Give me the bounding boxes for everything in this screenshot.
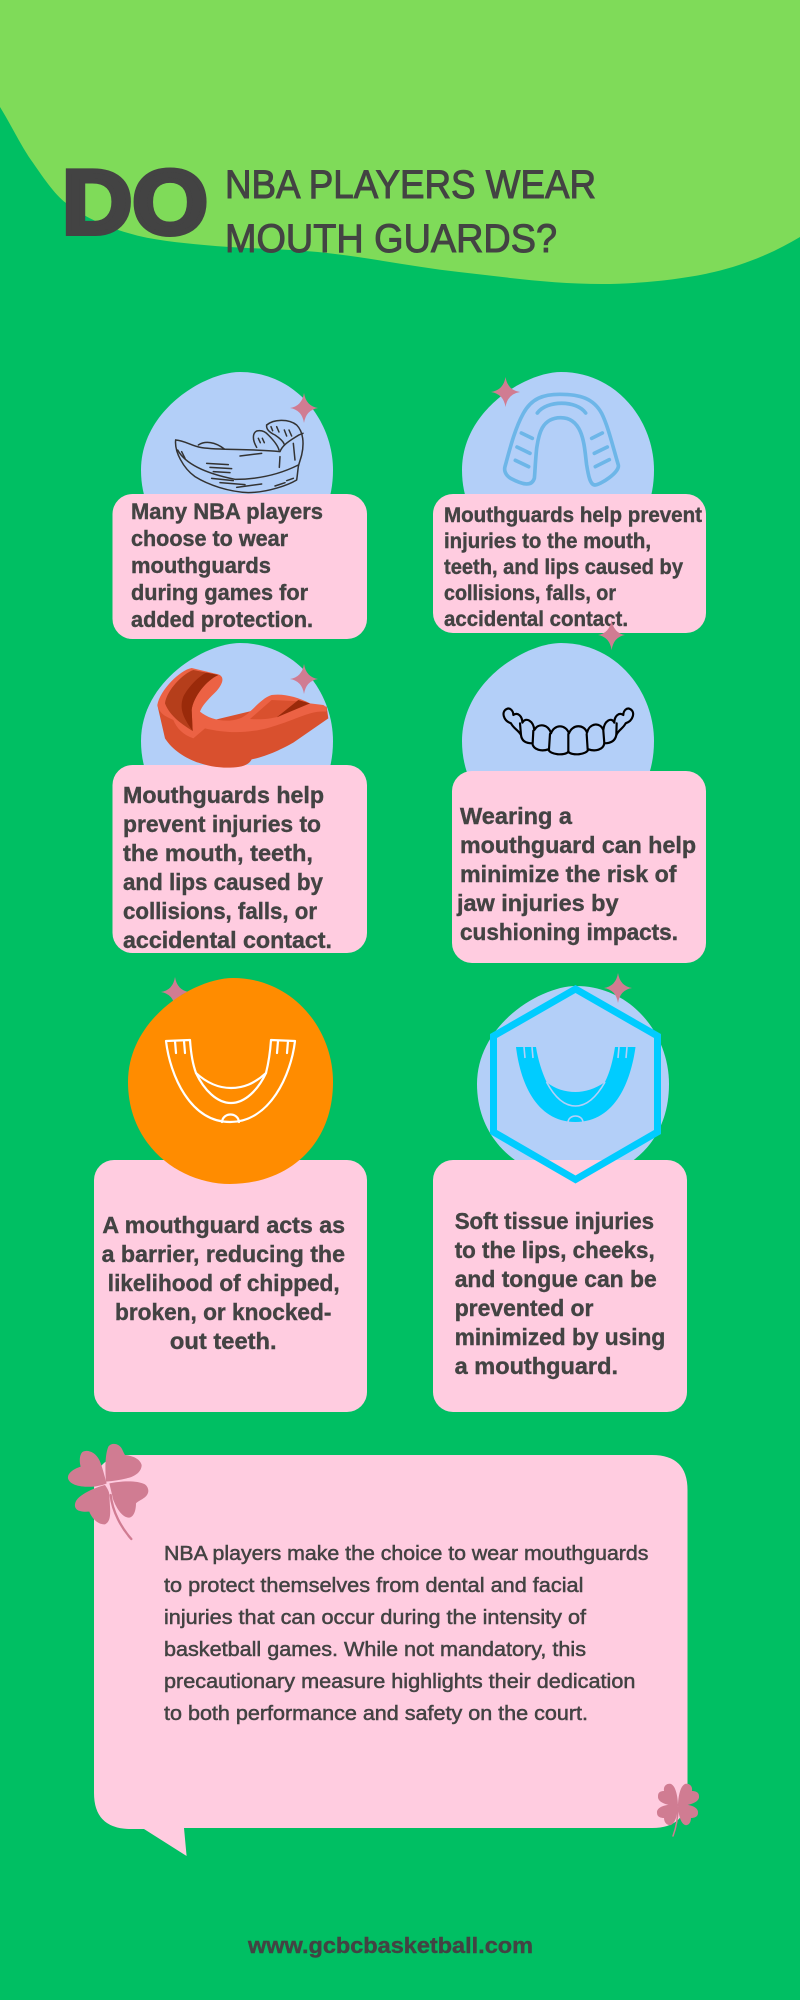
panel: many players choose mouthguards [112, 372, 367, 639]
icon: blue hexagon frame [494, 989, 658, 1180]
card 5 [94, 1160, 367, 1412]
card 3 [112, 765, 367, 953]
card 3 text: collisions, falls, or [123, 898, 317, 924]
card 2 text: accidental contact. [444, 608, 628, 631]
panel: conclusion speech bubble [68, 1444, 699, 1856]
sparkle 1 [290, 393, 318, 423]
card 2 text: teeth, and lips caused by [444, 556, 683, 579]
panel: barrier against chipped teeth [94, 977, 367, 1412]
card 5 text: A mouthguard acts as [102, 1212, 345, 1238]
icon: blue mouthguard [516, 1047, 636, 1122]
sparkle 5 [161, 977, 189, 1007]
card 5 text: a barrier, reducing the [102, 1241, 345, 1267]
icon backdrop blob 6 [477, 986, 669, 1179]
card 4 [452, 771, 706, 963]
card 6 text [455, 1208, 665, 1379]
card 3 text: the mouth, teeth, [123, 840, 313, 866]
card 6 text: prevented or [455, 1295, 594, 1321]
card 2 text: Mouthguards help prevent [444, 504, 702, 527]
card 6 text: Soft tissue injuries [455, 1208, 654, 1234]
icon: red mouthguard [157, 668, 328, 768]
footer website: www.gcbcbasketball.com [247, 1933, 533, 1958]
icon backdrop blob 1 [141, 372, 333, 565]
panel: prevents injuries (middle left) [112, 643, 367, 953]
card 6 text: minimized by using [455, 1324, 665, 1350]
card 6 text: a mouthguard. [455, 1353, 618, 1379]
icon: teeth outline [504, 709, 633, 754]
title: DO [62, 152, 208, 254]
card 5 text: broken, or knocked- [115, 1299, 331, 1325]
card 1 text: Many NBA players [131, 499, 323, 524]
title: MOUTH GUARDS? [225, 217, 557, 261]
card 2 text: collisions, falls, or [444, 582, 616, 605]
panel: prevents injuries (top right) [433, 372, 706, 633]
card 2 text: injuries to the mouth, [444, 530, 651, 553]
card 3 text: accidental contact. [123, 927, 332, 953]
title: NBA PLAYERS WEAR [225, 163, 596, 207]
card 1 text: added protection. [131, 607, 313, 632]
card 3 text: Mouthguards help [123, 782, 324, 808]
sparkle over top-right card [598, 620, 625, 650]
card 2 text [444, 504, 702, 631]
card 4 text: cushioning impacts. [460, 919, 678, 945]
card 4 text: minimize the risk of [460, 861, 677, 887]
icon backdrop blob 4 [462, 643, 654, 836]
conclusion text: NBA players make the choice to wear mouthguards [164, 1543, 648, 1565]
card 3 text [123, 782, 332, 953]
conclusion text [164, 1543, 648, 1725]
card 3 text: prevent injuries to [123, 811, 321, 837]
card 3 text: and lips caused by [123, 869, 323, 895]
conclusion text: precautionary measure highlights their dedication [164, 1671, 635, 1693]
card 1 text: during games for [131, 580, 308, 605]
icon backdrop blob 3 [141, 643, 333, 836]
card 4 text: mouthguard can help [460, 832, 696, 858]
card 1 text [131, 499, 323, 632]
speech bubble [94, 1455, 688, 1856]
card 1 [112, 494, 367, 639]
icon: white mouthguard outline [166, 1040, 295, 1122]
icon: blue outline mouthguard [505, 394, 618, 485]
panel: jaw injuries [452, 643, 706, 963]
conclusion text: basketball games. While not mandatory, this [164, 1639, 586, 1661]
sparkle 3 [290, 664, 318, 694]
card 4 text: jaw injuries by [456, 890, 619, 916]
card 1 text: choose to wear [131, 526, 288, 551]
card 5 text: likelihood of chipped, [108, 1270, 340, 1296]
icon: large clover [68, 1444, 148, 1539]
icon backdrop blob 2 [462, 372, 654, 565]
card 5 text [102, 1212, 345, 1354]
card 5 text: out teeth. [170, 1328, 277, 1354]
orange circle [128, 978, 333, 1184]
header wave [0, 0, 800, 284]
card 6 text: and tongue can be [455, 1266, 657, 1292]
card 4 text [456, 803, 696, 945]
sparkle 6 [604, 973, 632, 1003]
conclusion text: to both performance and safety on the court. [164, 1703, 588, 1725]
icon: small clover [657, 1784, 699, 1836]
card 4 text: Wearing a [460, 803, 572, 829]
sparkle 2 [491, 377, 520, 407]
card 1 text: mouthguards [131, 553, 271, 578]
card 6 [433, 1160, 687, 1412]
panel: soft tissue injuries [433, 973, 687, 1412]
conclusion text: injuries that can occur during the intensity of [164, 1607, 586, 1629]
card 2 [433, 494, 706, 633]
card 6 text: to the lips, cheeks, [455, 1237, 655, 1263]
icon: sketched mouthguard [176, 420, 303, 493]
conclusion text: to protect themselves from dental and facial [164, 1575, 583, 1597]
title [62, 152, 596, 261]
